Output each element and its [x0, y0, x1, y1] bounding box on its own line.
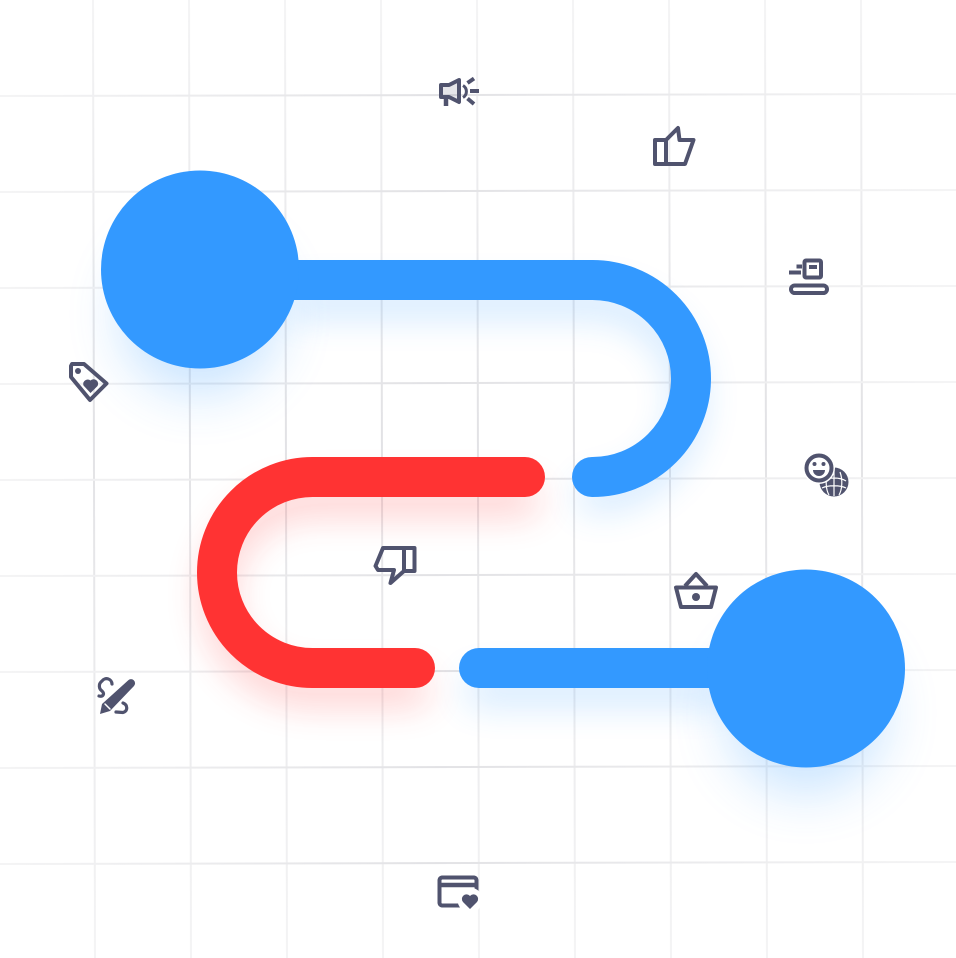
- red path: middle segment: [217, 477, 525, 668]
- icon: smiley and globe: [803, 452, 848, 496]
- icon: product on conveyor: [789, 260, 827, 293]
- icon: credit card with heart: [440, 878, 482, 912]
- icon: thumbs up: [655, 128, 694, 164]
- blue path: upper segment with start circle: [101, 170, 691, 477]
- icon: megaphone: [441, 78, 479, 106]
- path shadows: [122, 236, 884, 791]
- icon: pencil with squiggle: [99, 679, 135, 714]
- icon: basket: [676, 574, 716, 607]
- icon: price tag with heart: [71, 364, 106, 400]
- icon: thumbs down: [376, 548, 414, 583]
- blue path: lower segment with end circle: [479, 570, 905, 768]
